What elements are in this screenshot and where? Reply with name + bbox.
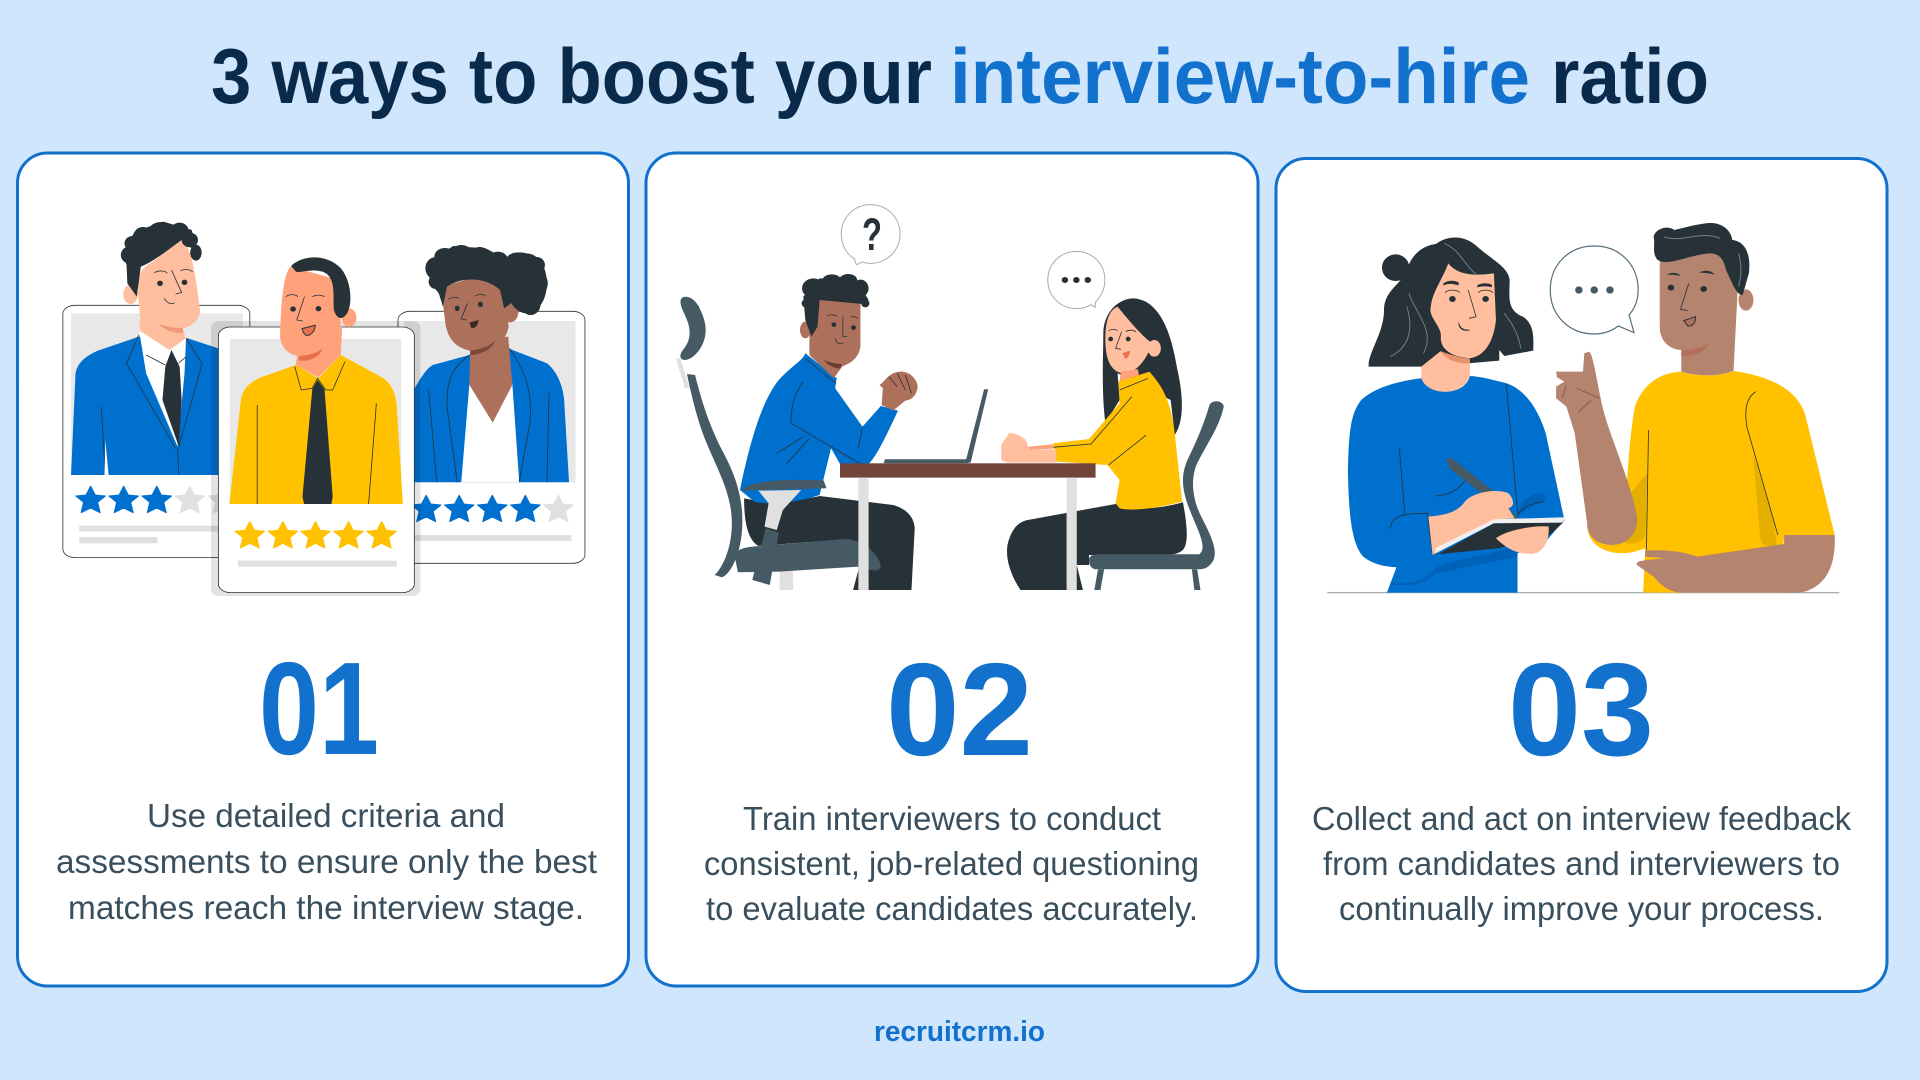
description 3: continually improve your process. bbox=[1339, 890, 1824, 927]
description 1: Use detailed criteria and bbox=[147, 797, 505, 834]
description 2: Train interviewers to conduct bbox=[743, 800, 1161, 837]
table bbox=[840, 463, 1096, 590]
star ratings on side cards bbox=[76, 486, 573, 543]
card 3 background bbox=[1276, 158, 1887, 992]
woman in yellow sweater bbox=[1001, 298, 1187, 590]
description 2 bbox=[704, 800, 1199, 927]
card 1 background bbox=[18, 153, 628, 986]
candidate card centre bbox=[211, 257, 420, 596]
card 2 background bbox=[646, 153, 1258, 986]
chair seat and armrest bbox=[735, 480, 881, 585]
description 1: assessments to ensure only the best bbox=[56, 843, 597, 880]
title: 3 ways to boost your bbox=[211, 32, 932, 120]
question mark: ? bbox=[862, 209, 882, 260]
candidate card right bbox=[398, 245, 585, 563]
footer brand: recruitcrm.io bbox=[874, 1016, 1045, 1048]
description 3: Collect and act on interview feedback bbox=[1312, 800, 1851, 837]
number 01: 01 bbox=[259, 635, 379, 782]
speech bubble: question outline bbox=[841, 205, 900, 265]
man in yellow t-shirt bbox=[1556, 223, 1835, 593]
panel: way 3 bbox=[1276, 158, 1887, 992]
title bbox=[211, 32, 1709, 120]
man in blue shirt bbox=[740, 274, 918, 590]
description 2: to evaluate candidates accurately. bbox=[706, 890, 1198, 927]
woman with notebook bbox=[1348, 238, 1565, 593]
office chair left bbox=[676, 297, 793, 590]
candidate card left bbox=[63, 222, 250, 558]
number 02: 02 bbox=[886, 636, 1033, 783]
office chair right bbox=[1089, 401, 1224, 590]
description 3 bbox=[1312, 800, 1851, 927]
description 1: matches reach the interview stage. bbox=[68, 889, 584, 926]
speech bubble bbox=[1550, 246, 1638, 334]
ground line bbox=[1327, 592, 1839, 593]
speech bubble: typing dots bbox=[1048, 251, 1105, 309]
panel: way 1 bbox=[18, 153, 628, 986]
panel: way 2 bbox=[646, 153, 1258, 986]
illustration: feedback conversation bbox=[1327, 223, 1839, 593]
title: ratio bbox=[1551, 32, 1709, 120]
description 2: consistent, job-related questioning bbox=[704, 845, 1199, 882]
title: interview-to-hire bbox=[950, 32, 1530, 120]
description 1 bbox=[56, 797, 597, 926]
illustration: interview at a table bbox=[676, 205, 1224, 590]
illustration: rated candidates bbox=[63, 222, 585, 596]
description 3: from candidates and interviewers to bbox=[1323, 845, 1840, 882]
laptop bbox=[884, 389, 988, 463]
number 03: 03 bbox=[1508, 636, 1654, 783]
